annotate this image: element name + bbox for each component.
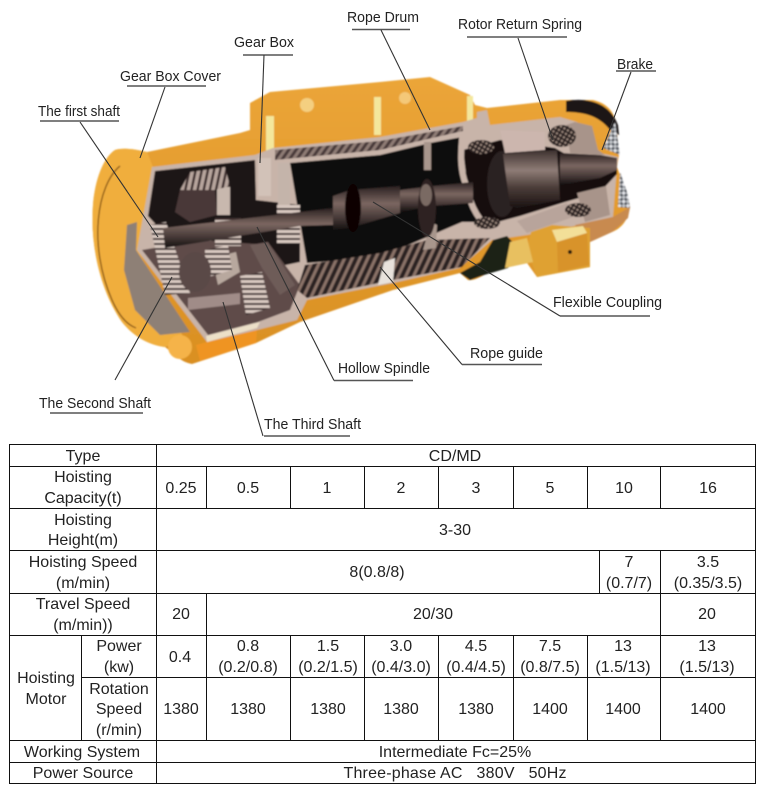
row: Rotation Speed: Rotation — [89, 681, 149, 698]
row: Hoisting Speed: (0.7/7) — [606, 575, 652, 592]
motor rotor — [503, 150, 560, 208]
row: Power: (0.8/7.5) — [520, 659, 580, 676]
row: Hoisting Capacity: 0.25 — [165, 480, 197, 497]
row: Rotation Speed: 1380 — [458, 701, 494, 718]
row: Hoisting Capacity: 10 — [615, 480, 633, 497]
row: Power: 7.5 — [539, 638, 561, 655]
hollow spindle — [163, 208, 333, 248]
row group: Hoisting Motor: Hoisting — [17, 670, 75, 687]
row: Power: 0.8 — [237, 638, 259, 655]
row group: Hoisting Motor — [17, 670, 75, 708]
label: The Third Shaft: The Third Shaft — [264, 417, 361, 433]
label: Flexible Coupling — [373, 202, 662, 316]
row: Working System: Working System — [24, 744, 140, 761]
gear support stems — [212, 142, 437, 285]
stator — [500, 130, 545, 153]
drum end wall — [461, 125, 494, 232]
label: Rotor Return Spring: Rotor Return Spring — [458, 17, 582, 33]
row: Working System — [24, 744, 531, 761]
label: Gear Box Cover — [120, 69, 221, 158]
row: Hoisting Capacity: 16 — [699, 480, 717, 497]
row: Power: 3.0 — [390, 638, 412, 655]
label: Rope Drum: Rope Drum — [347, 10, 419, 26]
row: Rotation Speed: 1380 — [310, 701, 346, 718]
row: Hoisting Capacity: 3 — [472, 480, 481, 497]
label: Rope guide: Rope guide — [470, 346, 543, 362]
row: Rotation Speed: 1400 — [532, 701, 568, 718]
row: Hoisting Speed: (m/min) — [56, 575, 110, 592]
label: The Second Shaft: The Second Shaft — [39, 396, 151, 412]
motor end shields — [566, 122, 605, 155]
row: Hoisting Capacity: Capacity(t) — [44, 490, 122, 507]
row: Type: CD/MD — [429, 448, 481, 465]
row: Hoisting Capacity: 5 — [546, 480, 555, 497]
top dark rim — [566, 100, 619, 135]
row: Rotation Speed: 1380 — [163, 701, 199, 718]
row: Hoisting Capacity — [44, 469, 717, 507]
row: Hoisting Speed: (0.35/3.5) — [674, 575, 742, 592]
row: Travel Speed: 20 — [172, 606, 190, 623]
gearbox dark chamber — [148, 160, 300, 270]
motor dark chamber — [463, 140, 617, 224]
label: The Second Shaft — [39, 277, 172, 413]
row: Power: 13 — [614, 638, 632, 655]
row: Hoisting Height: 3-30 — [439, 522, 471, 539]
bright orange lower casing — [196, 330, 257, 361]
row: Travel Speed: (m/min)) — [53, 617, 113, 634]
row: Power: (1.5/13) — [679, 659, 735, 676]
brake lower shell — [575, 207, 630, 242]
row: Power: (0.4/4.5) — [446, 659, 506, 676]
row: Rotation Speed: 1400 — [690, 701, 726, 718]
row: Power: 0.4 — [169, 649, 191, 666]
pale rib and bolt on top cover — [266, 92, 473, 156]
label: Hollow Spindle — [257, 227, 430, 380]
row: Power Source: Power Source — [33, 765, 133, 782]
drum dark chamber — [290, 137, 490, 263]
row: Hoisting Capacity: 0.5 — [237, 480, 259, 497]
row: Power Source: Three-phase AC 380V 50Hz — [344, 765, 566, 782]
row: Travel Speed: Travel Speed — [36, 596, 130, 613]
top gear teeth — [180, 167, 230, 190]
row: Hoisting Speed: Hoisting Speed — [29, 554, 137, 571]
top drum thread — [275, 126, 463, 160]
label: Rope Drum — [347, 10, 430, 130]
row: Power — [96, 638, 735, 676]
third shaft — [188, 293, 240, 310]
first shaft gear — [150, 222, 190, 295]
label: Gear Box — [234, 35, 295, 163]
rotor end bell — [487, 151, 517, 217]
row: Power: (0.4/3.0) — [371, 659, 431, 676]
row: Power: (0.2/0.8) — [218, 659, 278, 676]
left end cap — [92, 149, 185, 347]
row: Hoisting Height: Height(m) — [48, 532, 118, 549]
label: The first shaft — [38, 104, 158, 237]
row: Rotation Speed — [89, 681, 726, 739]
lower casing bump — [168, 335, 192, 359]
casing cut face — [137, 110, 618, 342]
label: Rotor Return Spring — [458, 17, 582, 140]
brake mesh — [603, 122, 620, 155]
row: Working System: Intermediate Fc=25% — [379, 744, 531, 761]
label: Brake: Brake — [617, 57, 653, 73]
row: Travel Speed — [36, 596, 716, 634]
row: Power: 1.5 — [317, 638, 339, 655]
bottom drum thread — [297, 238, 490, 298]
lower right gear housing — [250, 242, 295, 295]
row: Power: 13 — [698, 638, 716, 655]
orange outer casing — [92, 77, 630, 364]
row: Rotation Speed: 1380 — [383, 701, 419, 718]
label: Brake — [602, 57, 656, 150]
row: Power: (kw) — [104, 659, 134, 676]
row: Rotation Speed: Speed — [96, 701, 142, 718]
illustration: cutaway electric hoist — [92, 77, 630, 364]
specification table — [9, 444, 756, 784]
row: Hoisting Height — [48, 512, 471, 549]
table grid — [9, 444, 756, 784]
row: Power: 4.5 — [465, 638, 487, 655]
coupling housing foot — [460, 236, 520, 280]
row: Power: Power — [96, 638, 142, 655]
row: Power: (1.5/13) — [595, 659, 651, 676]
row: Power: (0.2/1.5) — [298, 659, 358, 676]
motor shaft — [560, 153, 617, 185]
terminal box — [527, 225, 590, 277]
drum shaft barrel — [333, 186, 400, 230]
label: Rope guide — [380, 267, 543, 364]
row group: Hoisting Motor: Motor — [26, 691, 67, 708]
lower casing highlight — [206, 322, 260, 342]
row: Travel Speed: 20/30 — [413, 606, 453, 623]
label: Hollow Spindle: Hollow Spindle — [338, 361, 430, 377]
label: The first shaft: The first shaft — [38, 104, 120, 120]
row: Hoisting Speed: 7 — [625, 554, 634, 571]
label: The Third Shaft — [223, 302, 361, 436]
coupling — [418, 179, 436, 237]
row: Type — [66, 448, 481, 465]
label: Gear Box Cover: Gear Box Cover — [120, 69, 221, 85]
row: Rotation Speed: 1400 — [605, 701, 641, 718]
row: Rotation Speed: (r/min) — [96, 722, 142, 739]
row: Power Source — [33, 765, 566, 782]
label: Flexible Coupling: Flexible Coupling — [553, 295, 662, 311]
upper shaft gears — [215, 218, 241, 246]
row: Hoisting Speed: 8(0.8/8) — [349, 564, 405, 581]
row: Hoisting Capacity: Hoisting — [54, 469, 112, 486]
motor windings — [468, 125, 591, 229]
row: Hoisting Height: Hoisting — [54, 512, 112, 529]
row: Travel Speed: 20 — [698, 606, 716, 623]
row: Type: Type — [66, 448, 100, 465]
gearbox lower chamber — [142, 240, 300, 335]
lower gears — [240, 272, 270, 315]
row: Hoisting Speed — [29, 554, 742, 592]
label: Gear Box: Gear Box — [234, 35, 295, 51]
row: Rotation Speed: 1380 — [230, 701, 266, 718]
row: Hoisting Capacity: 1 — [323, 480, 332, 497]
row: Hoisting Speed: 3.5 — [697, 554, 719, 571]
row: Hoisting Capacity: 2 — [397, 480, 406, 497]
grey end cap shadow — [124, 222, 190, 335]
